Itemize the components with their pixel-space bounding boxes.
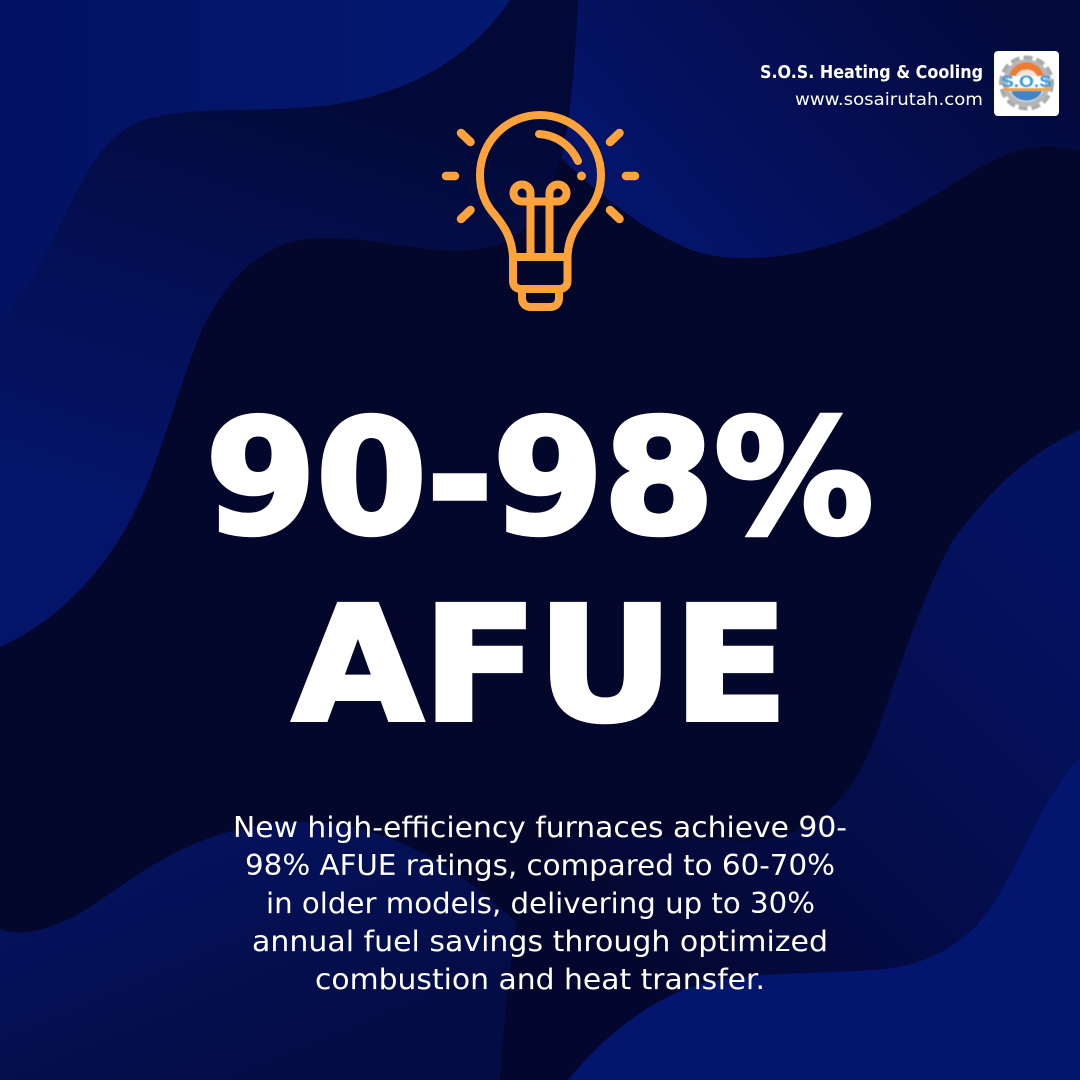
ray bottom-right (610, 210, 620, 219)
filament (514, 184, 566, 257)
icon: light bulb (446, 115, 635, 307)
ray right (626, 172, 635, 180)
ray top-left (461, 133, 470, 142)
body text (233, 811, 847, 996)
background: top-left bright wave (0, 0, 510, 322)
background: top-left mid-blue wave (0, 0, 578, 647)
glass highlight (539, 134, 578, 161)
background: top-right wave (561, 0, 1080, 258)
bulb screw base (513, 257, 568, 289)
logo badge: S.O.S (1001, 72, 1052, 91)
background: right wave (500, 430, 1080, 1080)
headline: 90-98%: 90-98% (206, 386, 874, 570)
icon: bulb highlight dot (577, 172, 586, 180)
ray left (446, 172, 455, 180)
bulb glass outline (480, 115, 601, 257)
brand name: S.O.S. Heating & Cooling (760, 63, 983, 83)
ray bottom-left (461, 210, 470, 219)
ray top-right (610, 133, 620, 142)
body text: New high-efficiency furnaces achieve 90- (233, 811, 847, 844)
body text: 98% AFUE ratings, compared to 60-70% (245, 849, 835, 882)
body text: annual fuel savings through optimized (252, 925, 828, 958)
headline: AFUE: AFUE (293, 574, 788, 758)
website: www.sosairutah.com (795, 90, 983, 110)
body text: combustion and heat transfer. (315, 963, 765, 996)
logo badge (994, 51, 1059, 116)
bulb tip (522, 289, 559, 307)
body text: in older models, delivering up to 30% (266, 887, 815, 920)
background: bottom-left wave (0, 822, 517, 1080)
background: bottom-right bright wave (568, 757, 1080, 1080)
